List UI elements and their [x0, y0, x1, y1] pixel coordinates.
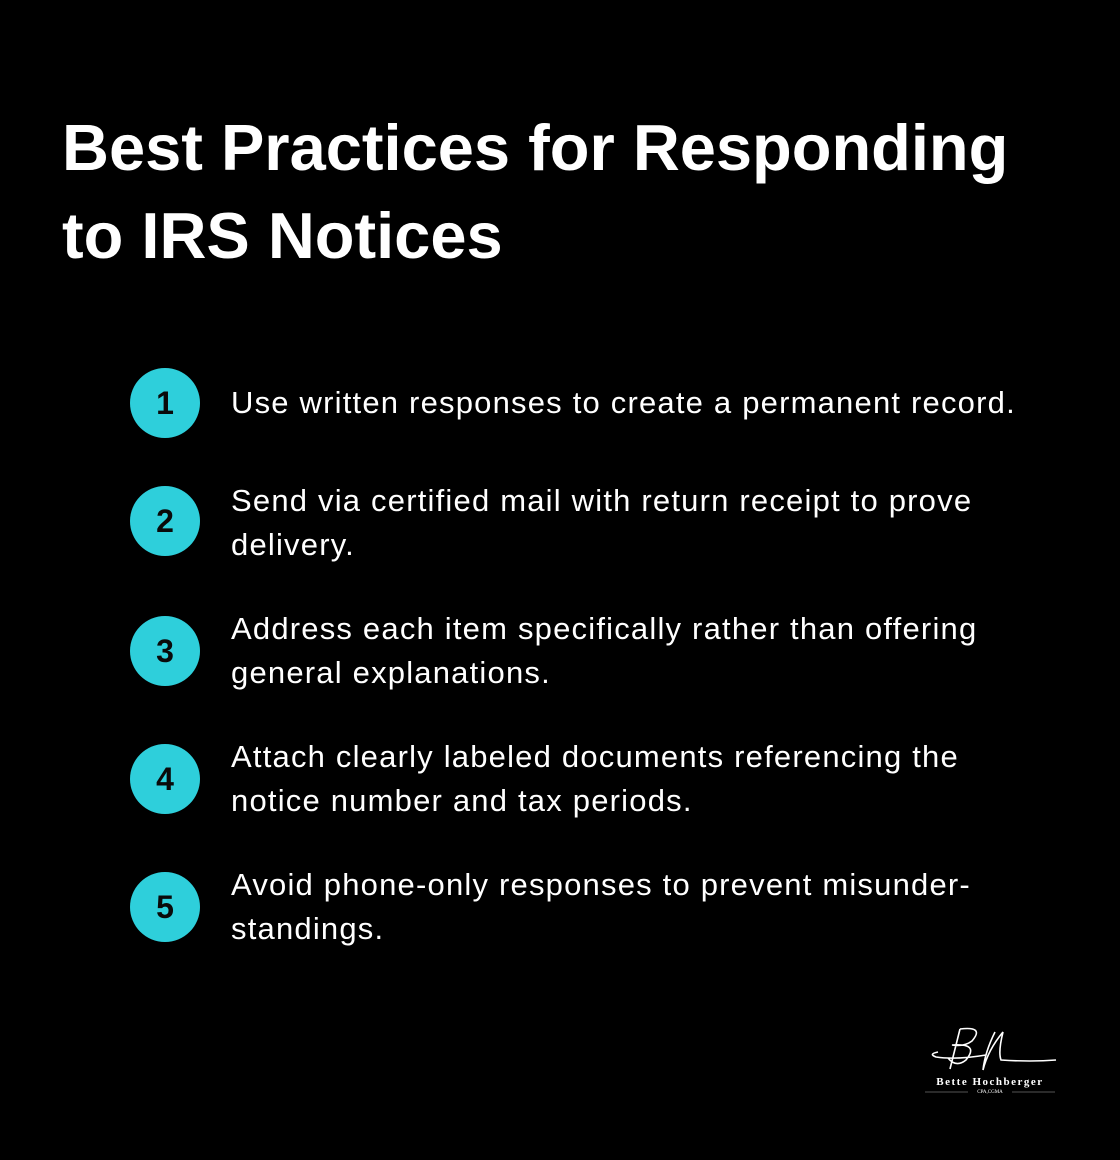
title — [62, 111, 1008, 272]
number circle 3: 3 — [156, 633, 174, 669]
number circle 2: 2 — [156, 503, 174, 539]
text 3: Address each item specifically rather than offering — [231, 611, 977, 646]
item 2 — [130, 483, 972, 562]
number circle 5: 5 — [156, 889, 174, 925]
text 4: notice number and tax periods. — [231, 783, 693, 818]
text 5: standings. — [231, 911, 384, 946]
number circle 1: 1 — [156, 385, 174, 421]
text 3: general explanations. — [231, 655, 551, 690]
text 5 — [231, 867, 971, 946]
number circle 5 — [130, 872, 200, 942]
title: to IRS Notices — [62, 199, 503, 272]
text 2: Send via certified mail with return receipt to prove — [231, 483, 972, 518]
text 5: Avoid phone-only responses to prevent misunder- — [231, 867, 971, 902]
item 1 — [130, 368, 1016, 438]
text 3 — [231, 611, 977, 690]
text 1: Use written responses to create a permanent record. — [231, 385, 1016, 420]
title: Best Practices for Responding — [62, 111, 1008, 184]
number circle 4 — [130, 744, 200, 814]
text 2: delivery. — [231, 527, 355, 562]
number circle 2 — [130, 486, 200, 556]
number circle 4: 4 — [156, 761, 174, 797]
text 4: Attach clearly labeled documents referencing the — [231, 739, 959, 774]
item 4 — [130, 739, 959, 818]
logo: Bette Hochberger — [936, 1076, 1044, 1088]
item 3 — [130, 611, 977, 690]
number circle 1 — [130, 368, 200, 438]
logo — [925, 1028, 1056, 1094]
text 4 — [231, 739, 959, 818]
number circle 3 — [130, 616, 200, 686]
item 5 — [130, 867, 971, 946]
text 2 — [231, 483, 972, 562]
